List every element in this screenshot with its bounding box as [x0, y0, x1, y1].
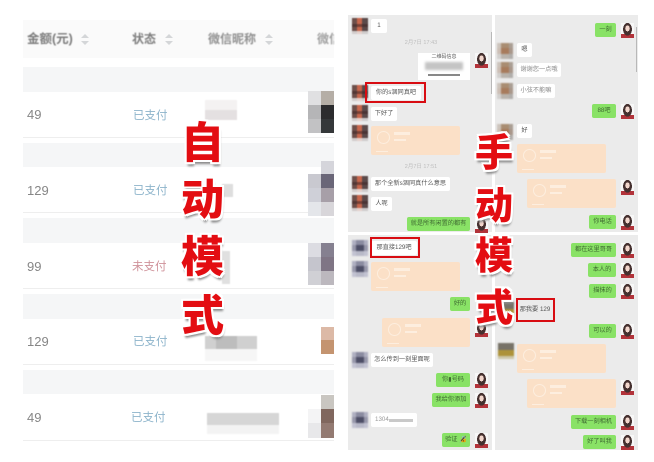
order row 3 status: unpaid: 未支付: [132, 261, 166, 273]
messages: top left chat: 2月7日 17:51: [405, 164, 437, 170]
panel: chat bottom left: [348, 235, 492, 450]
column heading: status: 状态: [132, 32, 156, 46]
table header row: [23, 20, 334, 58]
panel: chat top left: [348, 15, 492, 232]
heading: manual mode: 式: [475, 288, 513, 330]
blurred nicknames: [204, 100, 280, 434]
sort icon: status: [165, 34, 173, 45]
messages: bottom right chat: 可以的: [593, 327, 612, 334]
messages: bottom right chat: 都在这里哥哥: [575, 246, 612, 253]
order row 4 amount: 129: [27, 334, 49, 349]
callout: red box bottom right message: [516, 298, 555, 322]
messages: bottom left chat: 你▮号码: [442, 376, 464, 383]
order row 5 amount: 49: [27, 410, 41, 425]
messages: bottom left chat: 验证 🔏: [445, 436, 467, 443]
messages: top right chat: 你电话: [593, 218, 612, 225]
column heading: amount: 金额(元): [27, 32, 73, 46]
messages: top left chat: 2月7日 17:43: [405, 40, 437, 46]
messages: top right chat: 嗯: [521, 46, 528, 53]
heading: automatic mode: [180, 120, 226, 341]
messages: top right chat: 谢谢您一点哦: [520, 66, 558, 73]
messages: bottom right chat: 本人的: [593, 266, 611, 273]
order row 5 status: 已支付: [131, 412, 166, 424]
messages: bottom left chat: 我给你添加: [436, 396, 466, 403]
messages: top left chat: 下好了: [375, 110, 393, 117]
panel: automatic mode order table: [23, 31, 334, 441]
column heading: WeChat nickname: 微信昵称: [208, 32, 256, 46]
order row 2 status: 已支付: [133, 185, 168, 197]
messages: top left chat: 1: [377, 22, 381, 29]
heading: automatic mode: 式: [181, 293, 224, 341]
messages: bottom right chat: 那我要 129: [520, 306, 550, 313]
heading: automatic mode: 动: [181, 177, 224, 225]
order row 1 status: 已支付: [133, 110, 168, 122]
messages: top right chat: 一刻: [599, 26, 612, 33]
scrollbar: [491, 32, 492, 94]
panel: chat top right: [495, 15, 638, 232]
heading: automatic mode: 自: [181, 120, 224, 168]
messages: top right chat: 好: [521, 127, 528, 134]
messages: bottom left chat: 那直接129吧: [376, 244, 412, 251]
panel: chat bottom right: [495, 235, 638, 450]
messages: top right chat: 88吧: [597, 107, 611, 114]
heading: automatic mode: 模: [181, 234, 224, 282]
heading: manual mode: 模: [475, 236, 513, 278]
heading: manual mode: 动: [475, 186, 513, 228]
messages: top left chat: 就是所有闲置的都有: [411, 220, 466, 227]
sort icon: nickname: [265, 34, 273, 45]
sort icon: amount: [81, 34, 89, 45]
order row 1 amount: 49: [27, 107, 41, 122]
messages: bottom right chat: 描抹的: [593, 287, 612, 294]
heading: manual mode: [474, 131, 514, 330]
callout: red box top left message: [365, 82, 426, 103]
messages: top left chat: 那个全新s涸同真什么意思: [375, 180, 446, 187]
messages: top left chat: 二维码信息: [431, 54, 456, 60]
messages: top left chat: 你的s涸同真吧: [376, 89, 416, 96]
messages: top right chat: 小弦不能嘛: [521, 87, 551, 94]
order row 4 status: 已支付: [133, 336, 168, 348]
blurred avatar thumbnails: [308, 91, 334, 438]
callout: red box bottom left message: [370, 237, 420, 258]
messages: top left chat: 人呢: [375, 200, 388, 207]
order row 3 amount: 99: [27, 259, 41, 274]
heading: manual mode: 手: [475, 133, 513, 175]
messages: bottom right chat: 下载一刻相机: [575, 418, 612, 425]
messages: bottom right chat: 好了叫我: [587, 438, 612, 445]
scrollbar: [636, 27, 637, 72]
messages: bottom left chat: 怎么传到一刻里面呢: [374, 356, 430, 363]
messages: bottom left chat: 1304: [375, 416, 389, 423]
grey separator bands: [23, 67, 334, 441]
messages: bottom left chat: 好的: [454, 300, 466, 307]
order row 2 amount: 129: [27, 183, 49, 198]
